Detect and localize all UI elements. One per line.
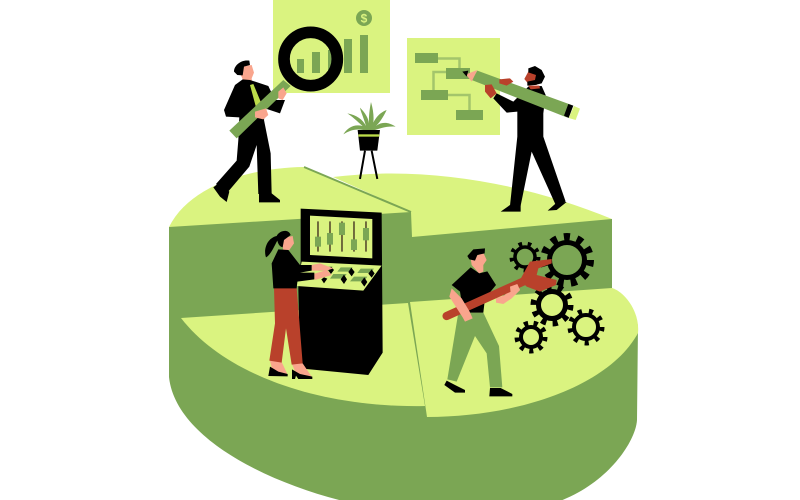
pie slice: top left	[169, 167, 411, 227]
potted plant	[343, 102, 396, 179]
face	[240, 65, 254, 84]
pot stripe	[358, 134, 379, 137]
bar chart	[297, 35, 368, 73]
icon: dollar coin: $	[361, 12, 368, 26]
hands	[485, 78, 513, 98]
man with magnifying glass	[213, 32, 337, 202]
right arm	[496, 284, 520, 304]
keyboard panel	[297, 262, 382, 291]
trousers	[447, 313, 502, 387]
magnifier ring	[284, 32, 337, 86]
feet	[270, 361, 312, 377]
trousers	[269, 288, 303, 365]
gear lower	[518, 324, 544, 350]
control machine	[297, 209, 383, 375]
flowchart panel	[407, 38, 500, 135]
face	[524, 72, 538, 85]
tie	[250, 84, 261, 107]
pot	[358, 130, 380, 151]
machine body	[298, 209, 383, 375]
wrench	[447, 259, 557, 316]
jacket	[224, 79, 285, 121]
gear right	[570, 312, 602, 342]
face	[471, 253, 487, 273]
pie slice: top right	[333, 173, 612, 237]
keys	[318, 267, 375, 287]
pie chart	[169, 167, 638, 500]
hair	[234, 60, 250, 75]
hair and beard	[527, 66, 545, 86]
giant pencil	[462, 70, 580, 120]
shoes	[444, 381, 512, 396]
heels	[268, 367, 312, 379]
gear small top	[512, 244, 538, 270]
woman at machine	[265, 231, 333, 379]
chart panel with magnifier target	[273, 0, 390, 93]
suit	[493, 86, 566, 206]
stand legs	[360, 151, 377, 179]
gears	[512, 237, 602, 350]
plant leaves	[343, 102, 396, 134]
top	[272, 249, 314, 288]
shoes	[213, 183, 280, 202]
man with pencil	[462, 66, 580, 212]
slice divider line	[304, 167, 411, 212]
legs	[216, 117, 272, 194]
shoes	[501, 202, 567, 212]
slider tracks	[318, 221, 366, 252]
hair	[467, 248, 485, 261]
hand on wrench	[510, 284, 520, 295]
gear large	[544, 237, 590, 283]
pie chart base	[169, 167, 638, 500]
shirt	[452, 267, 496, 313]
flowchart connectors	[434, 58, 470, 112]
arms	[312, 263, 333, 280]
gear middle	[534, 287, 570, 323]
left arm	[449, 288, 473, 322]
pie slice: front left	[181, 303, 425, 406]
slider knobs	[315, 223, 369, 250]
pencil handle	[229, 80, 291, 138]
hands	[255, 87, 287, 119]
pie slice: front right	[410, 288, 638, 417]
flowchart boxes	[415, 53, 483, 120]
hair	[265, 231, 291, 257]
screen	[310, 216, 372, 258]
face	[281, 236, 294, 250]
man with wrench	[444, 248, 557, 396]
collar	[528, 86, 540, 89]
